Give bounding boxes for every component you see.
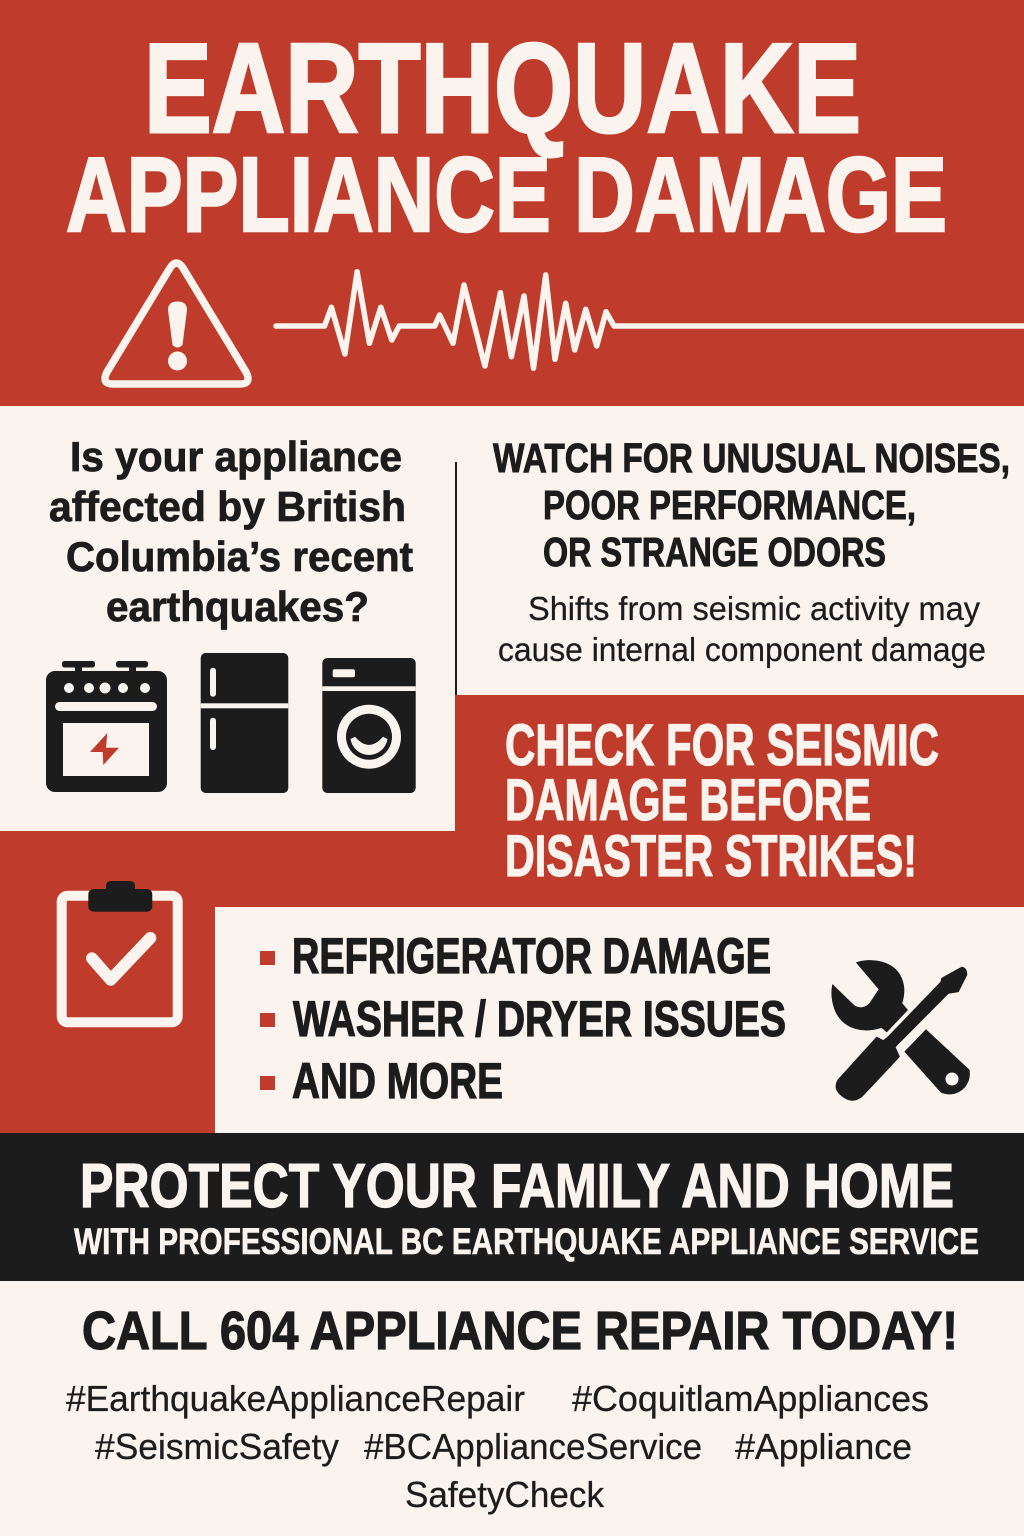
list item: washer dryer issues: WASHER / DRYER ISSUES	[293, 991, 786, 1047]
check callout: DAMAGE BEFORE	[505, 768, 871, 833]
warning description: cause internal component damage	[498, 631, 986, 668]
question text: affected by British	[49, 483, 406, 530]
panel: red header	[0, 0, 1024, 406]
question text: earthquakes?	[106, 583, 369, 630]
panel: warning signs	[493, 435, 1010, 668]
icon: stove	[46, 661, 167, 792]
hashtags: #SeismicSafety	[95, 1426, 339, 1467]
question text: Columbia’s recent	[66, 533, 413, 580]
title line 1: EARTHQUAKE	[144, 17, 861, 159]
icon: seismograph line	[276, 272, 1024, 368]
icon: wrench and screwdriver	[832, 961, 969, 1100]
warning description	[498, 590, 986, 668]
panel: red check band	[0, 695, 1024, 1133]
list item: and more	[260, 1053, 503, 1109]
question text	[49, 433, 413, 630]
hashtags: #CoquitlamAppliances	[572, 1378, 929, 1419]
hashtags	[66, 1378, 929, 1515]
hashtags: #EarthquakeApplianceRepair	[66, 1378, 525, 1419]
icon: clipboard checklist	[62, 881, 178, 1022]
warning heading	[493, 435, 1010, 575]
icon: refrigerator	[201, 653, 288, 793]
icon: washing machine	[322, 658, 416, 793]
warning heading: OR STRANGE ODORS	[543, 529, 886, 575]
hashtags: #BCApplianceService	[364, 1426, 702, 1467]
icon: warning triangle	[105, 263, 248, 384]
check callout	[505, 713, 939, 889]
panel: black protect banner	[0, 1133, 1024, 1281]
list item: and more: AND MORE	[292, 1053, 503, 1109]
panel: question with appliances	[0, 406, 455, 831]
warning heading: POOR PERFORMANCE,	[543, 482, 916, 528]
hashtags: #Appliance	[735, 1426, 912, 1467]
warning description: Shifts from seismic activity may	[528, 590, 980, 627]
hashtags: SafetyCheck	[405, 1474, 605, 1515]
divider	[455, 462, 457, 695]
question text: Is your appliance	[70, 433, 402, 480]
panel: damage list	[215, 907, 1024, 1133]
list item: refrigerator damage: REFRIGERATOR DAMAGE	[292, 928, 771, 984]
